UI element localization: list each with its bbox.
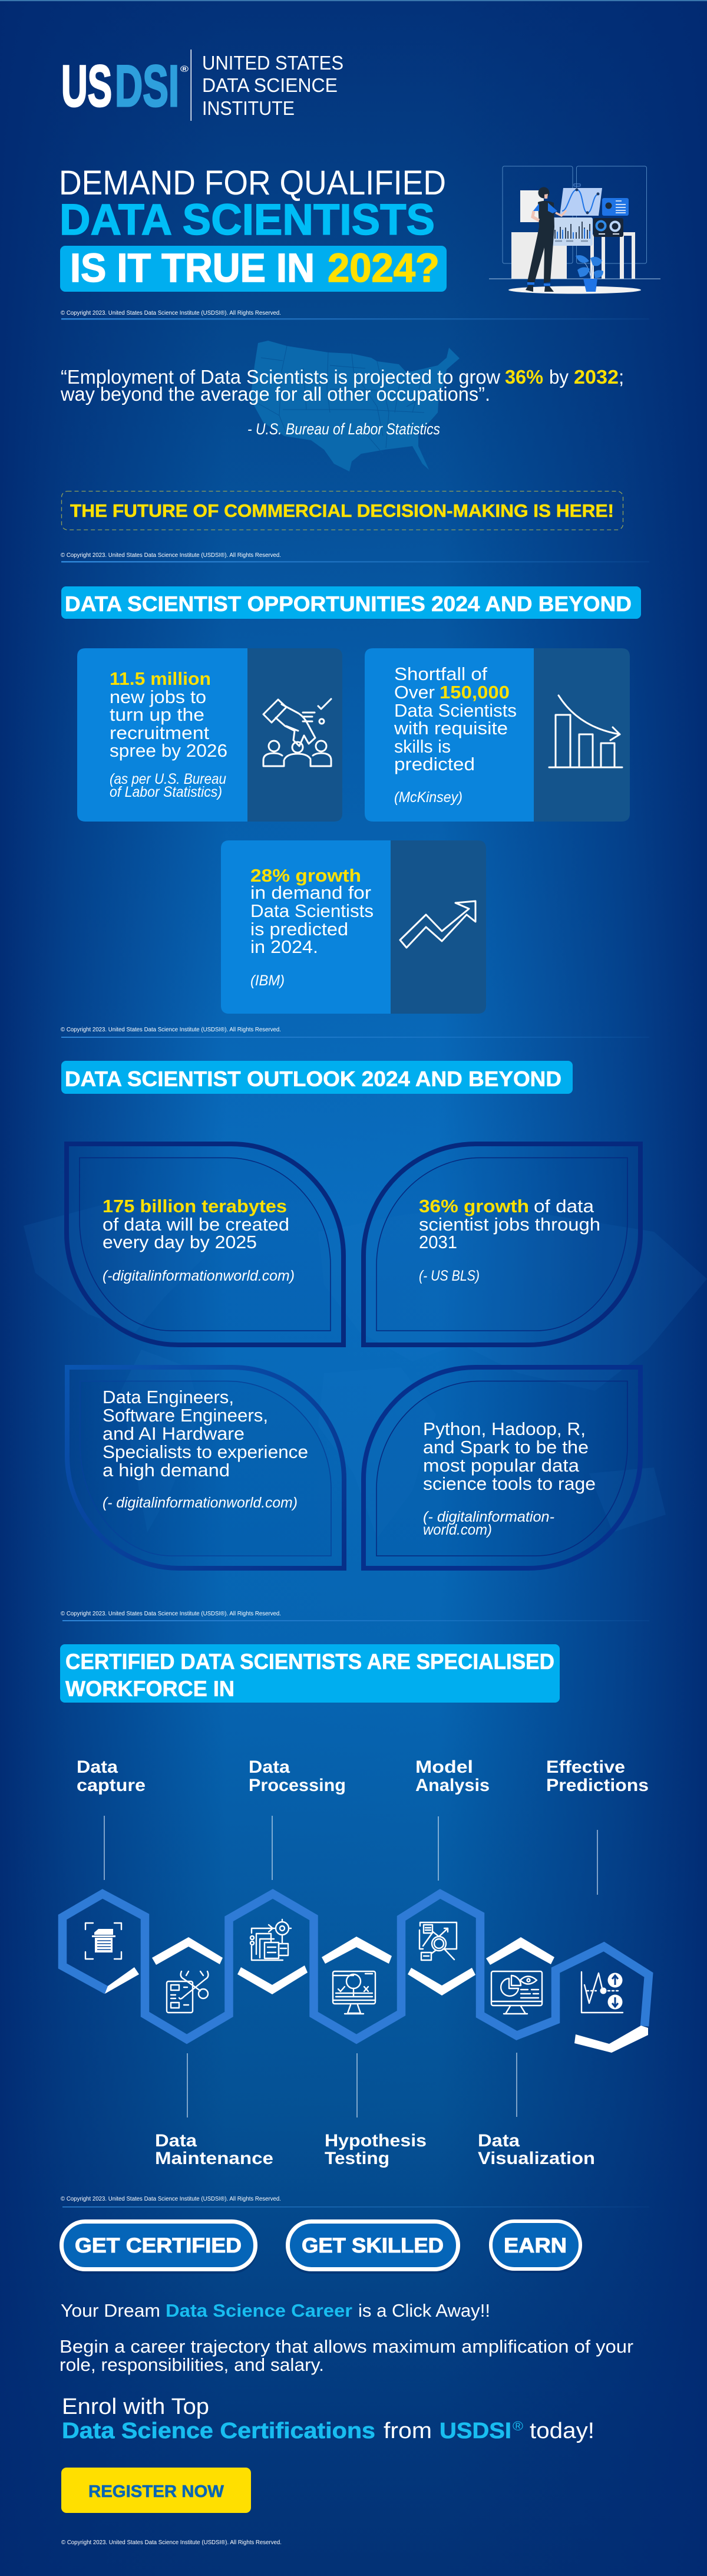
button: register now: REGISTER NOW xyxy=(88,2482,224,2501)
quote: “Employment of Data Scientists is projected to grow xyxy=(61,366,500,388)
text: jobs growth stat: of data xyxy=(534,1196,594,1216)
text: terabytes stat: 175 billion terabytes xyxy=(103,1196,287,1216)
text: terabytes stat: (-digitalinformationworld.com) xyxy=(103,1268,295,1284)
label: model analysis: Model xyxy=(415,1757,473,1777)
label: effective predictions xyxy=(546,1757,649,1795)
heading: outlook xyxy=(61,1061,573,1094)
text: engineers demand: Software Engineers, xyxy=(103,1405,268,1426)
text: jobs stat xyxy=(110,668,227,800)
label: model analysis: Analysis xyxy=(415,1776,490,1795)
quote: way beyond the average for all other occupations”. xyxy=(60,383,490,405)
button: get skilled xyxy=(286,2222,460,2274)
quote: ; xyxy=(619,366,624,388)
text: growth stat: in demand for xyxy=(250,882,371,903)
icon: hypothesis testing xyxy=(333,1971,375,2014)
text: enrol call to action: from xyxy=(384,2419,432,2443)
label: data processing xyxy=(249,1757,346,1795)
text: enrol call to action xyxy=(62,2394,594,2443)
connector lines xyxy=(104,1816,597,2117)
label: data capture: capture xyxy=(77,1776,146,1795)
button: earn xyxy=(489,2221,582,2273)
icon: declining bar chart xyxy=(549,695,622,767)
heading: specialised workforce: CERTIFIED DATA SCIENTISTS ARE SPECIALISED xyxy=(65,1650,554,1674)
text: shortfall stat: predicted xyxy=(394,754,475,774)
text: engineers demand xyxy=(103,1387,308,1511)
logo mark USDSI xyxy=(61,53,189,118)
button: earn: EARN xyxy=(504,2234,567,2257)
world map backdrop xyxy=(24,1202,707,1538)
copyright 1: © Copyright 2023. United States Data Science Institute (USDSI®). All Rights Reserved. xyxy=(61,309,281,316)
text: career trajectory xyxy=(60,2336,633,2375)
copyright 3: © Copyright 2023. United States Data Science Institute (USDSI®). All Rights Reserved. xyxy=(61,1026,281,1033)
heading: outlook: DATA SCIENTIST OUTLOOK 2024 AND BEYOND xyxy=(65,1067,561,1091)
label: data maintenance: Maintenance xyxy=(155,2149,273,2168)
icon: data maintenance xyxy=(167,1971,208,2013)
button: get certified: GET CERTIFIED xyxy=(75,2234,242,2257)
text: growth stat: (IBM) xyxy=(250,972,285,989)
icon: rising arrow xyxy=(400,901,475,948)
callout: future of decision making xyxy=(61,492,623,530)
title banner: 2024? xyxy=(328,245,440,291)
text: jobs growth stat: 2031 xyxy=(419,1232,457,1252)
icon: model analysis xyxy=(419,1922,457,1960)
logo mark USDSI: DSI xyxy=(115,53,179,118)
quote xyxy=(60,366,624,405)
panel: data engineers xyxy=(67,1367,344,1568)
quote attribution: - U.S. Bureau of Labor Statistics xyxy=(247,420,440,438)
text: jobs growth stat: scientist jobs through xyxy=(419,1214,600,1235)
text: growth stat: is predicted xyxy=(250,919,348,939)
text: jobs stat: (as per U.S. Bureau xyxy=(110,771,226,787)
label: data maintenance: Data xyxy=(155,2131,197,2150)
logo xyxy=(61,50,343,121)
text: enrol call to action: Data Science Certifications xyxy=(62,2419,375,2443)
text: enrol call to action: Enrol with Top xyxy=(62,2394,209,2419)
label: hypothesis testing: Hypothesis xyxy=(325,2131,427,2150)
heading: opportunities: DATA SCIENTIST OPPORTUNITIES 2024 AND BEYOND xyxy=(65,592,632,616)
text: tools: (- digitalinformation- xyxy=(423,1509,554,1525)
label: hypothesis testing: Testing xyxy=(325,2149,389,2168)
label: data capture xyxy=(77,1757,146,1795)
logo wordmark: INSTITUTE xyxy=(202,97,295,119)
text: tools: world.com) xyxy=(423,1522,492,1538)
icon: data processing xyxy=(250,1919,291,1960)
text: engineers demand: a high demand xyxy=(103,1460,230,1480)
label: effective predictions: Predictions xyxy=(546,1776,649,1795)
label: data maintenance xyxy=(155,2131,273,2168)
panel: popular tools xyxy=(364,1367,640,1568)
panel: 11.5 million jobs xyxy=(77,648,342,822)
text: jobs stat: of Labor Statistics) xyxy=(110,784,222,800)
quote: by xyxy=(549,366,569,388)
text: growth stat xyxy=(250,865,374,989)
icon: data capture xyxy=(85,1923,121,1959)
text: engineers demand: and AI Hardware xyxy=(103,1423,245,1444)
heading: specialised workforce xyxy=(60,1644,560,1703)
text: shortfall stat: Shortfall of xyxy=(394,664,487,684)
text: engineers demand: Specialists to experience xyxy=(103,1442,308,1462)
title banner: IS IT TRUE IN xyxy=(70,245,315,291)
text: growth stat: Data Scientists xyxy=(250,901,374,921)
label: data processing: Processing xyxy=(249,1776,346,1795)
label: data visualization: Data xyxy=(478,2131,520,2150)
text: growth stat: in 2024. xyxy=(250,936,318,957)
button: get certified xyxy=(60,2222,257,2274)
copyright 4: © Copyright 2023. United States Data Science Institute (USDSI®). All Rights Reserved. xyxy=(61,1610,281,1617)
panel: 150,000 shortfall xyxy=(365,648,630,822)
text: tools xyxy=(423,1419,596,1538)
button: get skilled: GET SKILLED xyxy=(302,2234,444,2257)
quote: 36% xyxy=(505,366,543,388)
text: terabytes stat: every day by 2025 xyxy=(103,1232,257,1252)
copyright 5: © Copyright 2023. United States Data Science Institute (USDSI®). All Rights Reserved. xyxy=(61,2195,281,2202)
text: enrol call to action: ® xyxy=(513,2419,523,2433)
text: dream career: Your Dream xyxy=(61,2300,160,2321)
text: jobs growth stat: 36% growth xyxy=(419,1196,529,1216)
text: shortfall stat: Over xyxy=(394,682,435,702)
text: terabytes stat: of data will be created xyxy=(103,1214,289,1235)
text: jobs stat: turn up the xyxy=(110,704,204,725)
text: engineers demand: Data Engineers, xyxy=(103,1387,234,1407)
text: dream career: is a Click Away!! xyxy=(358,2300,490,2321)
text: tools: and Spark to be the xyxy=(423,1437,589,1457)
icon: effective predictions xyxy=(582,1972,623,2013)
callout: future of decision making: THE FUTURE OF COMMERCIAL DECISION-MAKING IS HERE! xyxy=(70,500,614,521)
text: jobs stat: recruitment xyxy=(110,723,209,743)
text: tools: science tools to rage xyxy=(423,1473,596,1494)
text: shortfall stat: 150,000 xyxy=(440,682,510,702)
text: career trajectory: Begin a career trajectory that allows maximum amplification of your xyxy=(60,2336,633,2357)
text: shortfall stat: skills is xyxy=(394,736,451,757)
text: tools: most popular data xyxy=(423,1455,580,1476)
text: enrol call to action: today! xyxy=(530,2419,594,2443)
panel: 36% growth xyxy=(364,1144,640,1345)
title xyxy=(59,164,447,292)
heading: specialised workforce: WORKFORCE IN xyxy=(65,1677,234,1701)
panel: 175 billion terabytes xyxy=(67,1144,343,1345)
text: enrol call to action: USDSI xyxy=(440,2419,511,2443)
text: shortfall stat: (McKinsey) xyxy=(394,789,462,806)
title: DATA SCIENTISTS xyxy=(60,195,435,244)
label: model analysis xyxy=(415,1757,490,1795)
logo wordmark: UNITED STATES xyxy=(202,52,343,74)
logo mark USDSI: US xyxy=(61,53,112,118)
logo mark USDSI: ® xyxy=(180,64,189,74)
text: shortfall stat: Data Scientists xyxy=(394,700,517,721)
quote: 2032 xyxy=(574,366,619,388)
text: dream career: Data Science Career xyxy=(166,2300,352,2321)
panel: 28% growth xyxy=(221,840,486,1014)
icon: data visualization xyxy=(491,1971,542,2014)
text: dream career xyxy=(61,2300,490,2321)
logo wordmark: DATA SCIENCE xyxy=(202,74,338,96)
label: hypothesis testing xyxy=(325,2131,427,2168)
copyright 2: © Copyright 2023. United States Data Science Institute (USDSI®). All Rights Reserved. xyxy=(61,552,281,559)
text: jobs growth stat: (- US BLS) xyxy=(419,1268,480,1284)
title banner xyxy=(60,245,447,292)
label: data capture: Data xyxy=(77,1757,118,1777)
label: data processing: Data xyxy=(249,1757,290,1777)
map of the USA xyxy=(250,341,460,471)
text: jobs stat: new jobs to xyxy=(110,687,206,707)
hexagon chain xyxy=(62,1894,649,2053)
label: data visualization xyxy=(478,2131,595,2168)
button: register now xyxy=(61,2468,251,2513)
text: shortfall stat xyxy=(394,664,517,806)
label: data visualization: Visualization xyxy=(478,2149,595,2168)
label: effective predictions: Effective xyxy=(546,1757,625,1777)
text: shortfall stat: with requisite xyxy=(394,718,508,738)
text: engineers demand: (- digitalinformationworld.com) xyxy=(103,1495,298,1511)
text: career trajectory: role, responsibilities, and salary. xyxy=(60,2354,324,2375)
logo wordmark xyxy=(202,52,343,119)
illustration: analyst with dashboards xyxy=(489,166,660,293)
text: tools: Python, Hadoop, R, xyxy=(423,1419,586,1439)
text: jobs growth stat xyxy=(419,1196,600,1284)
text: jobs stat: 11.5 million xyxy=(110,668,211,689)
title: DEMAND FOR QUALIFIED xyxy=(59,164,446,202)
text: growth stat: 28% growth xyxy=(250,865,361,886)
icon: hand over people xyxy=(263,699,331,766)
text: terabytes stat xyxy=(103,1196,295,1284)
copyright 6: © Copyright 2023. United States Data Science Institute (USDSI®). All Rights Reserved. xyxy=(61,2539,282,2546)
text: jobs stat: spree by 2026 xyxy=(110,740,227,761)
